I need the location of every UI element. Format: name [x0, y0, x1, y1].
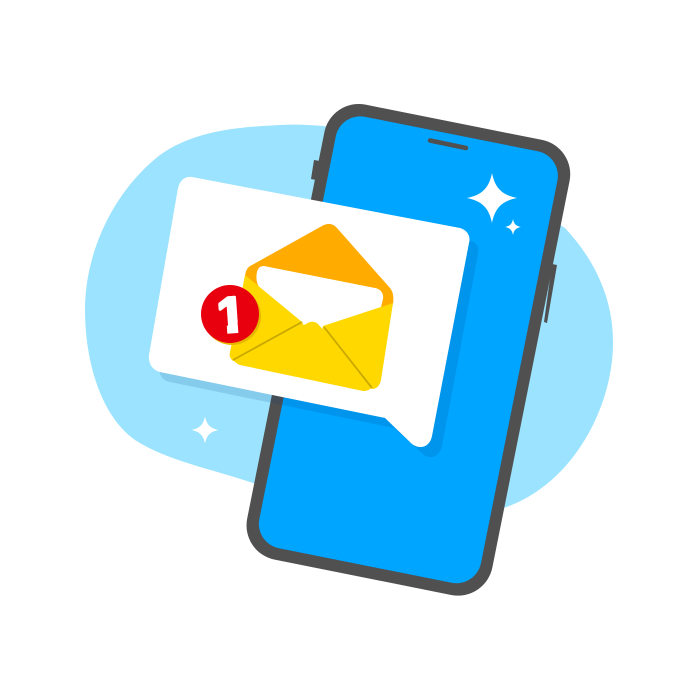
background blob — [85, 125, 613, 510]
envelope right panel — [320, 303, 393, 389]
envelope back flap — [245, 224, 393, 332]
phone speaker — [430, 140, 466, 148]
phone body — [240, 98, 576, 602]
sparkle small — [505, 219, 521, 235]
phone side buttons — [311, 160, 557, 323]
badge number: 1 — [215, 286, 247, 344]
sparkle large — [467, 173, 517, 223]
badge shadow — [203, 287, 261, 345]
phone screen — [254, 112, 562, 588]
speech bubble — [149, 177, 470, 447]
badge circle — [201, 285, 259, 343]
illustration: phone with new message notification — [85, 104, 613, 596]
letter — [256, 266, 383, 330]
envelope — [201, 224, 393, 391]
envelope front flap — [233, 322, 372, 391]
envelope left panel — [230, 275, 312, 361]
sparkle lower left — [192, 416, 218, 444]
phone — [240, 98, 576, 602]
envelope fold lines — [233, 322, 372, 388]
notification badge — [201, 285, 261, 345]
speech bubble shadow — [159, 197, 479, 457]
